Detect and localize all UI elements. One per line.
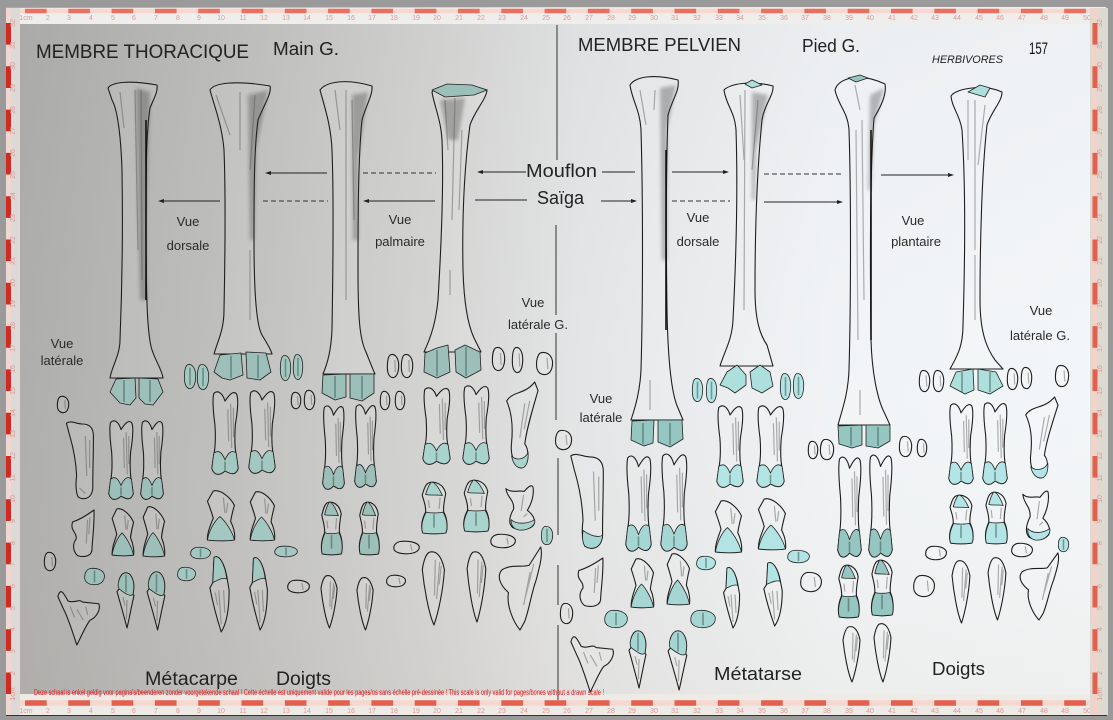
view label: vue dorsale: Vue xyxy=(177,214,199,229)
phalanges: hindlimb column 2 xyxy=(692,373,821,628)
heading: pied gauche: Pied G. xyxy=(802,36,860,56)
view label: vue latérale G.: latérale G. xyxy=(508,317,568,332)
caption: métacarpe: Métacarpe xyxy=(145,668,238,690)
phalanges: forelimb column 1 xyxy=(44,396,165,645)
view label: vue latérale pelvien: latérale xyxy=(580,410,622,425)
bone: metatarsal plantar mouflon xyxy=(835,75,890,448)
phalanges: forelimb column 3 xyxy=(321,354,419,630)
heading: main gauche: Main G. xyxy=(273,39,339,59)
title: membre thoracique: MEMBRE THORACIQUE xyxy=(36,41,249,63)
caption: doigts pelvien: Doigts xyxy=(932,659,985,679)
phalanges: forelimb column 2 xyxy=(178,354,315,632)
view label: vue dorsale: dorsale xyxy=(167,238,209,253)
scale disclaimer: Deze schaal is enkel geldig voor pagina's/beenderen zonder voorgetekende schaal ! Cette échelle est uniquement valide pour les pages/os sans échelle pré-dessinée ! This scale is only valid for pages/bones without a drawn scale ! xyxy=(34,688,604,697)
view label: vue palmaire: Vue xyxy=(389,212,411,227)
bone: metacarpal palmar mouflon xyxy=(320,82,375,401)
view label: vue plantaire: plantaire xyxy=(891,234,941,249)
view label: vue palmaire: palmaire xyxy=(375,234,425,249)
hindlimb metatarsals xyxy=(630,75,1003,448)
bone: metacarpal dorsal mouflon xyxy=(108,82,163,405)
caption: métatarse: Métatarse xyxy=(714,664,802,684)
ruler: top xyxy=(6,8,1107,24)
heading: herbivores: HERBIVORES xyxy=(932,54,1004,66)
central divider xyxy=(556,25,558,700)
page number: 157 xyxy=(1029,39,1048,58)
view label: vue latérale: latérale xyxy=(41,353,83,368)
ruler: left xyxy=(6,8,20,715)
bone: metacarpal lateral xyxy=(424,84,487,378)
view label: vue latérale: Vue xyxy=(51,336,73,351)
bone: metacarpal palmar saiga xyxy=(210,83,272,380)
species label: Saïga: Saïga xyxy=(537,188,585,208)
view label: vue latérale G. pelvien: Vue xyxy=(1030,303,1052,318)
title: membre pelvien: MEMBRE PELVIEN xyxy=(578,35,741,55)
phalanges: hindlimb column 1 xyxy=(556,430,715,692)
bone: metatarsal dorsal saiga xyxy=(720,80,773,393)
species label: Mouflon: Mouflon xyxy=(526,161,597,181)
phalanges: forelimb column 4 xyxy=(422,347,553,630)
view label: vue dorsale pelvien: Vue xyxy=(687,210,709,225)
arrows: mouflon and saiga leader lines xyxy=(158,170,954,204)
view label: vue latérale pelvien: Vue xyxy=(590,391,612,406)
view label: vue dorsale pelvien: dorsale xyxy=(677,234,719,249)
view label: vue latérale G.: Vue xyxy=(522,295,544,310)
view label: vue plantaire: Vue xyxy=(902,213,924,228)
ruler: right xyxy=(1090,8,1108,715)
forelimb metacarpals xyxy=(108,82,487,405)
phalanges: hindlimb column 4 xyxy=(914,365,1069,623)
bone: metatarsal dorsal mouflon xyxy=(630,77,683,447)
phalanges: hindlimb column 3 xyxy=(808,436,927,682)
view label: vue latérale G. pelvien: latérale G. xyxy=(1010,328,1070,343)
ruler: bottom xyxy=(6,694,1107,716)
bone: metatarsal lateral xyxy=(950,85,1003,394)
caption: doigts: Doigts xyxy=(276,668,331,690)
